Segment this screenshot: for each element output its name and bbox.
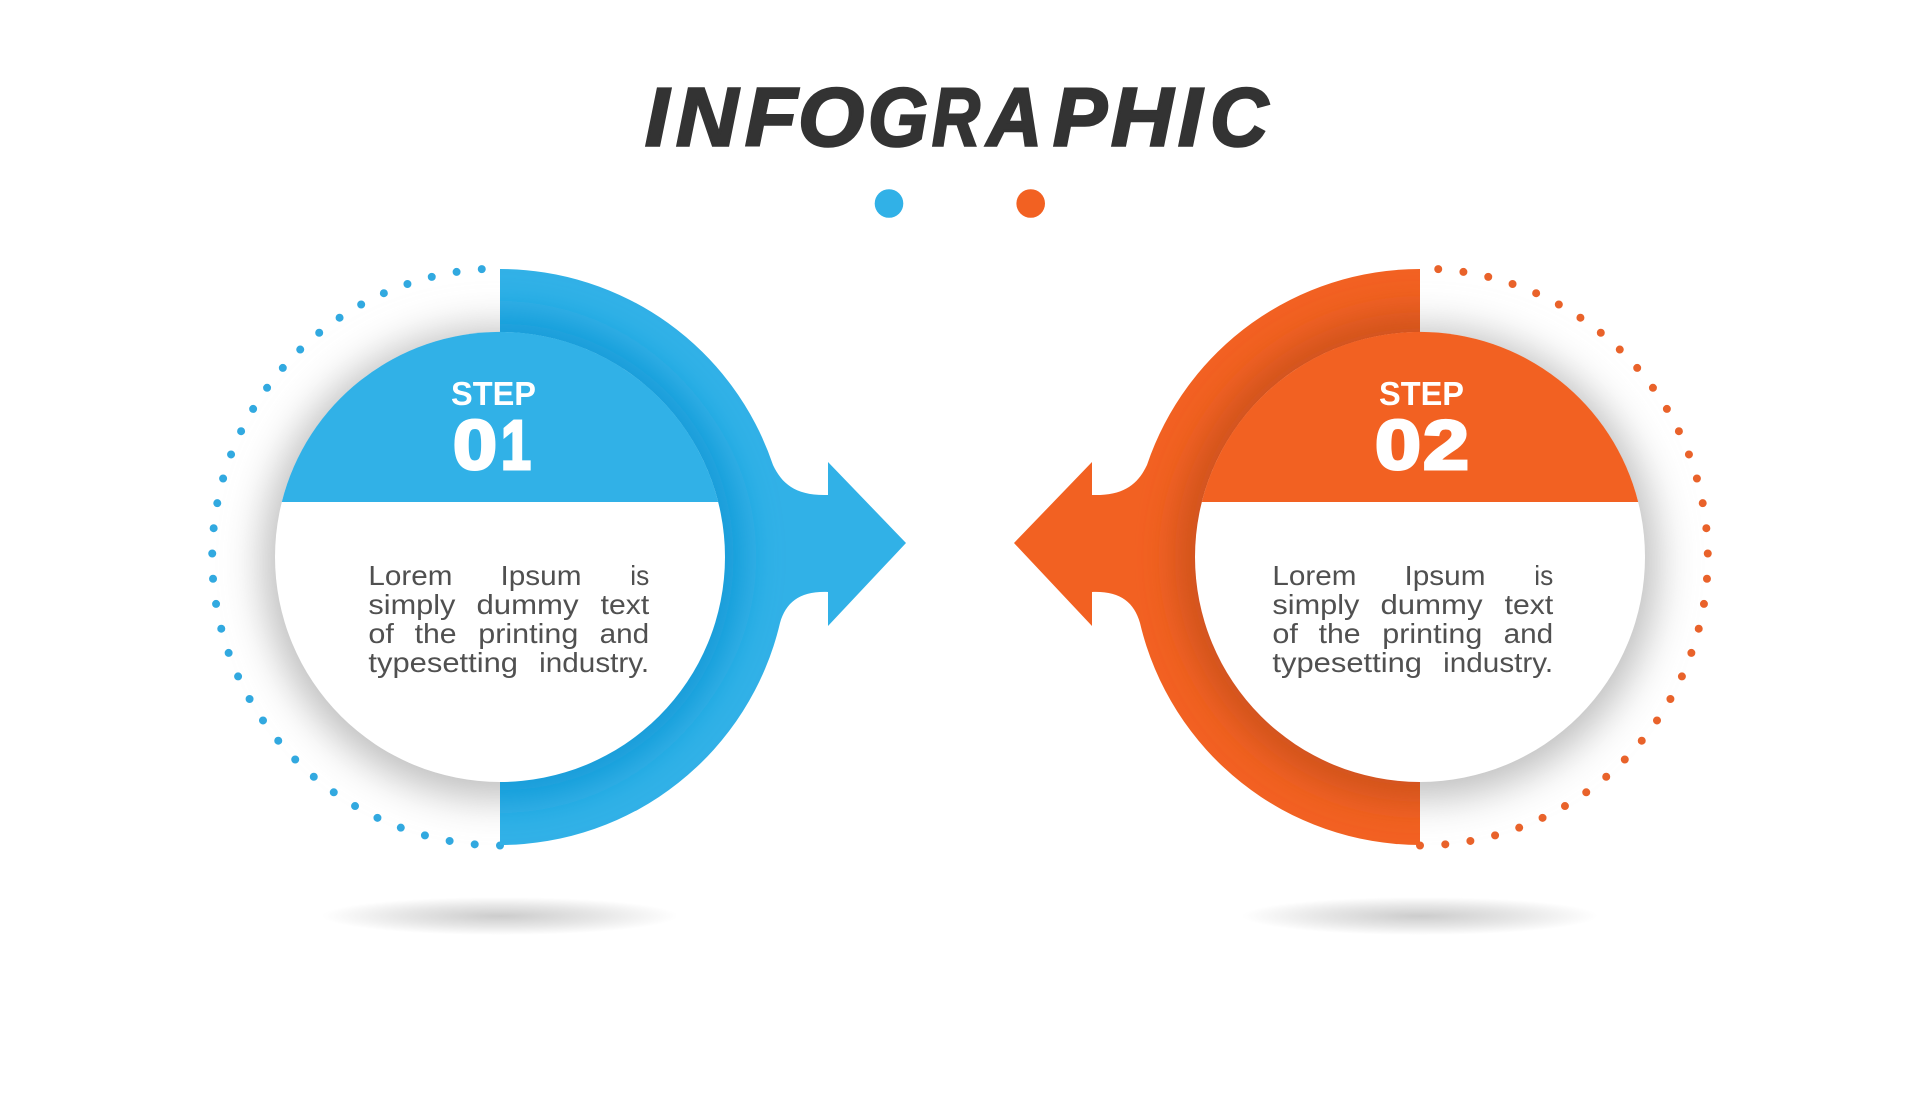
header segment: step 02 xyxy=(1202,332,1638,502)
step label: step 01: STEP xyxy=(451,376,536,413)
body text: step 01: dummy xyxy=(476,589,579,620)
legend dots xyxy=(875,189,1045,218)
step number: step 01: 0 xyxy=(453,406,497,484)
body text: step 01: Lorem xyxy=(368,560,452,591)
body text: step 02: text xyxy=(1505,589,1554,620)
arrow: step 01 xyxy=(500,269,906,845)
step number: step 01: 1 xyxy=(501,406,531,484)
mirrored graphics: step 02 xyxy=(1014,269,1708,846)
body text: step 02: printing xyxy=(1382,618,1482,649)
inner circle: step 01 xyxy=(275,332,725,782)
body text: step 02: and xyxy=(1504,618,1553,649)
inner circle: step 02 xyxy=(1195,332,1645,782)
dotted arc: step 02 xyxy=(1420,269,1708,846)
body text: step 02: Ipsum xyxy=(1404,560,1486,591)
body text: step 01 xyxy=(368,560,650,678)
arrow inner shading: step 02 xyxy=(1164,301,1420,813)
title: F xyxy=(745,70,799,164)
body text: step 02: simply xyxy=(1272,589,1360,620)
floor shadow: step 02 xyxy=(1242,897,1598,935)
body text: step 02: industry. xyxy=(1443,647,1553,678)
body text: step 01: industry. xyxy=(539,647,649,678)
title: O xyxy=(798,70,864,164)
body text: step 02: dummy xyxy=(1380,589,1483,620)
body text: step 02 xyxy=(1272,560,1554,678)
body text: step 01: simply xyxy=(368,589,456,620)
body text: step 02: the xyxy=(1319,618,1361,649)
circle shadow on white: step 02 xyxy=(1420,307,1678,819)
title: R xyxy=(932,70,980,164)
arrow: step 02 xyxy=(1014,269,1420,845)
body text: step 01: text xyxy=(601,589,650,620)
panel: step 01 xyxy=(212,269,906,935)
body text: step 02: typesetting xyxy=(1272,647,1422,678)
header segment: step 01 xyxy=(282,332,718,502)
body text: step 01: is xyxy=(630,560,649,591)
body text: step 02: Lorem xyxy=(1272,560,1356,591)
step number: step 02: 2 xyxy=(1423,406,1469,484)
title: G xyxy=(868,70,928,164)
body text: step 01: Ipsum xyxy=(500,560,582,591)
title: I xyxy=(1178,70,1204,164)
title: H xyxy=(1111,70,1175,164)
dotted arc: step 01 xyxy=(212,269,500,846)
body text: step 01: and xyxy=(600,618,649,649)
body text: step 01: typesetting xyxy=(368,647,518,678)
circle shadow on white: step 01 xyxy=(242,307,500,819)
title: I xyxy=(645,70,671,164)
floor shadow: step 01 xyxy=(322,897,678,935)
panel: step 02 xyxy=(1014,269,1708,935)
body text: step 01: the xyxy=(415,618,457,649)
title: N xyxy=(676,70,740,164)
title: C xyxy=(1210,70,1269,164)
body text: step 01: of xyxy=(368,618,394,649)
body text: step 02: of xyxy=(1272,618,1298,649)
title: P xyxy=(1053,70,1108,164)
body text: step 02: is xyxy=(1534,560,1553,591)
title: A xyxy=(985,70,1042,164)
body text: step 01: printing xyxy=(478,618,578,649)
step label: step 02: STEP xyxy=(1379,376,1464,413)
arrow inner shading: step 01 xyxy=(500,297,760,817)
step number: step 02: 0 xyxy=(1375,406,1421,484)
